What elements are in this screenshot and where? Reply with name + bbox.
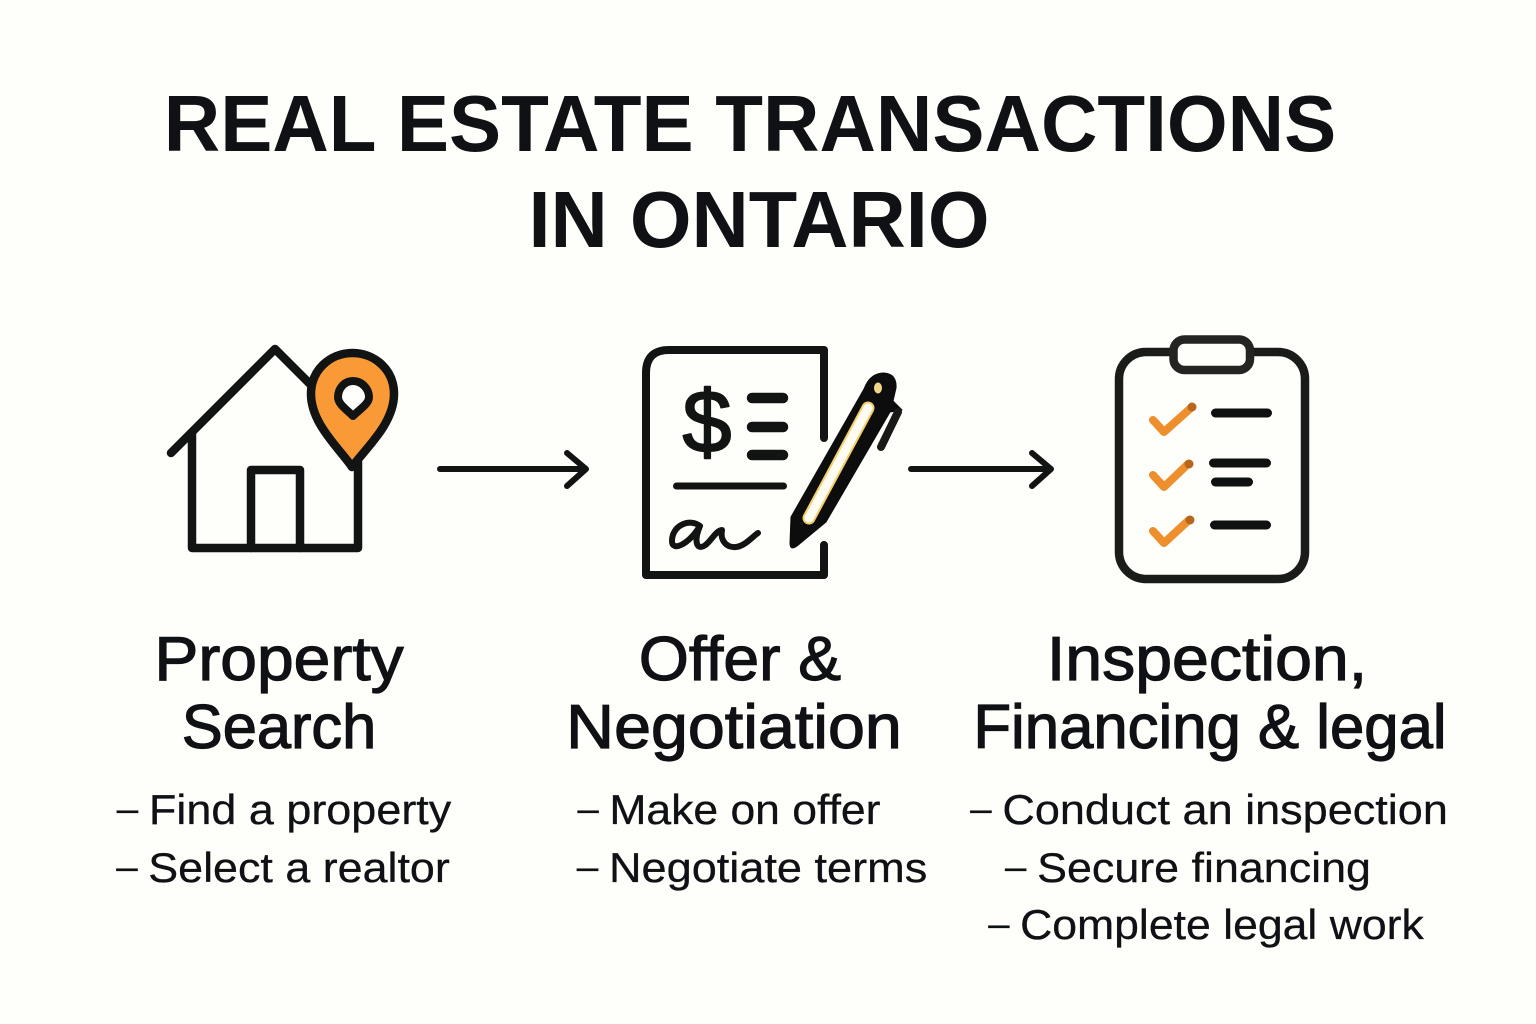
text: step 3 list: – Complete legal work xyxy=(988,901,1424,948)
text: step 3 list: – Conduct an inspection xyxy=(970,786,1447,833)
heading: property search: Search xyxy=(182,693,376,762)
text: step 2 list xyxy=(576,786,927,891)
heading: inspection, financing and legal: Inspection, xyxy=(1046,625,1367,694)
icon: signed offer document with pen xyxy=(646,350,902,575)
text: step 3 list xyxy=(970,786,1447,948)
text: step 3 list: – Secure financing xyxy=(1005,844,1370,891)
title xyxy=(164,79,1336,264)
step 3 text xyxy=(970,625,1447,948)
heading: offer and negotiation: Negotiation xyxy=(566,693,901,762)
heading: inspection, financing and legal xyxy=(973,625,1447,762)
text: step 1 list xyxy=(116,786,452,891)
arrow: offer to inspection xyxy=(911,453,1051,486)
text: step 1 list: – Find a property xyxy=(117,786,451,833)
text: step 2 list: – Negotiate terms xyxy=(577,844,927,891)
text: step 2 list: – Make on offer xyxy=(577,786,880,833)
heading: offer and negotiation: Offer & xyxy=(639,625,841,694)
step 1 text xyxy=(116,625,452,891)
icon: house with location pin xyxy=(171,349,394,548)
icon: dollar sign: $ xyxy=(683,372,731,471)
step 2 text xyxy=(566,625,927,891)
arrow: search to offer xyxy=(440,453,586,486)
heading: inspection, financing and legal: Financing & legal xyxy=(973,693,1447,762)
heading: property search xyxy=(154,625,404,762)
title: IN ONTARIO xyxy=(528,175,989,264)
title: REAL ESTATE TRANSACTIONS xyxy=(164,79,1336,168)
text: step 1 list: – Select a realtor xyxy=(116,844,450,891)
heading: offer and negotiation xyxy=(566,625,901,762)
heading: property search: Property xyxy=(154,625,404,694)
icon: clipboard checklist xyxy=(1119,340,1305,579)
